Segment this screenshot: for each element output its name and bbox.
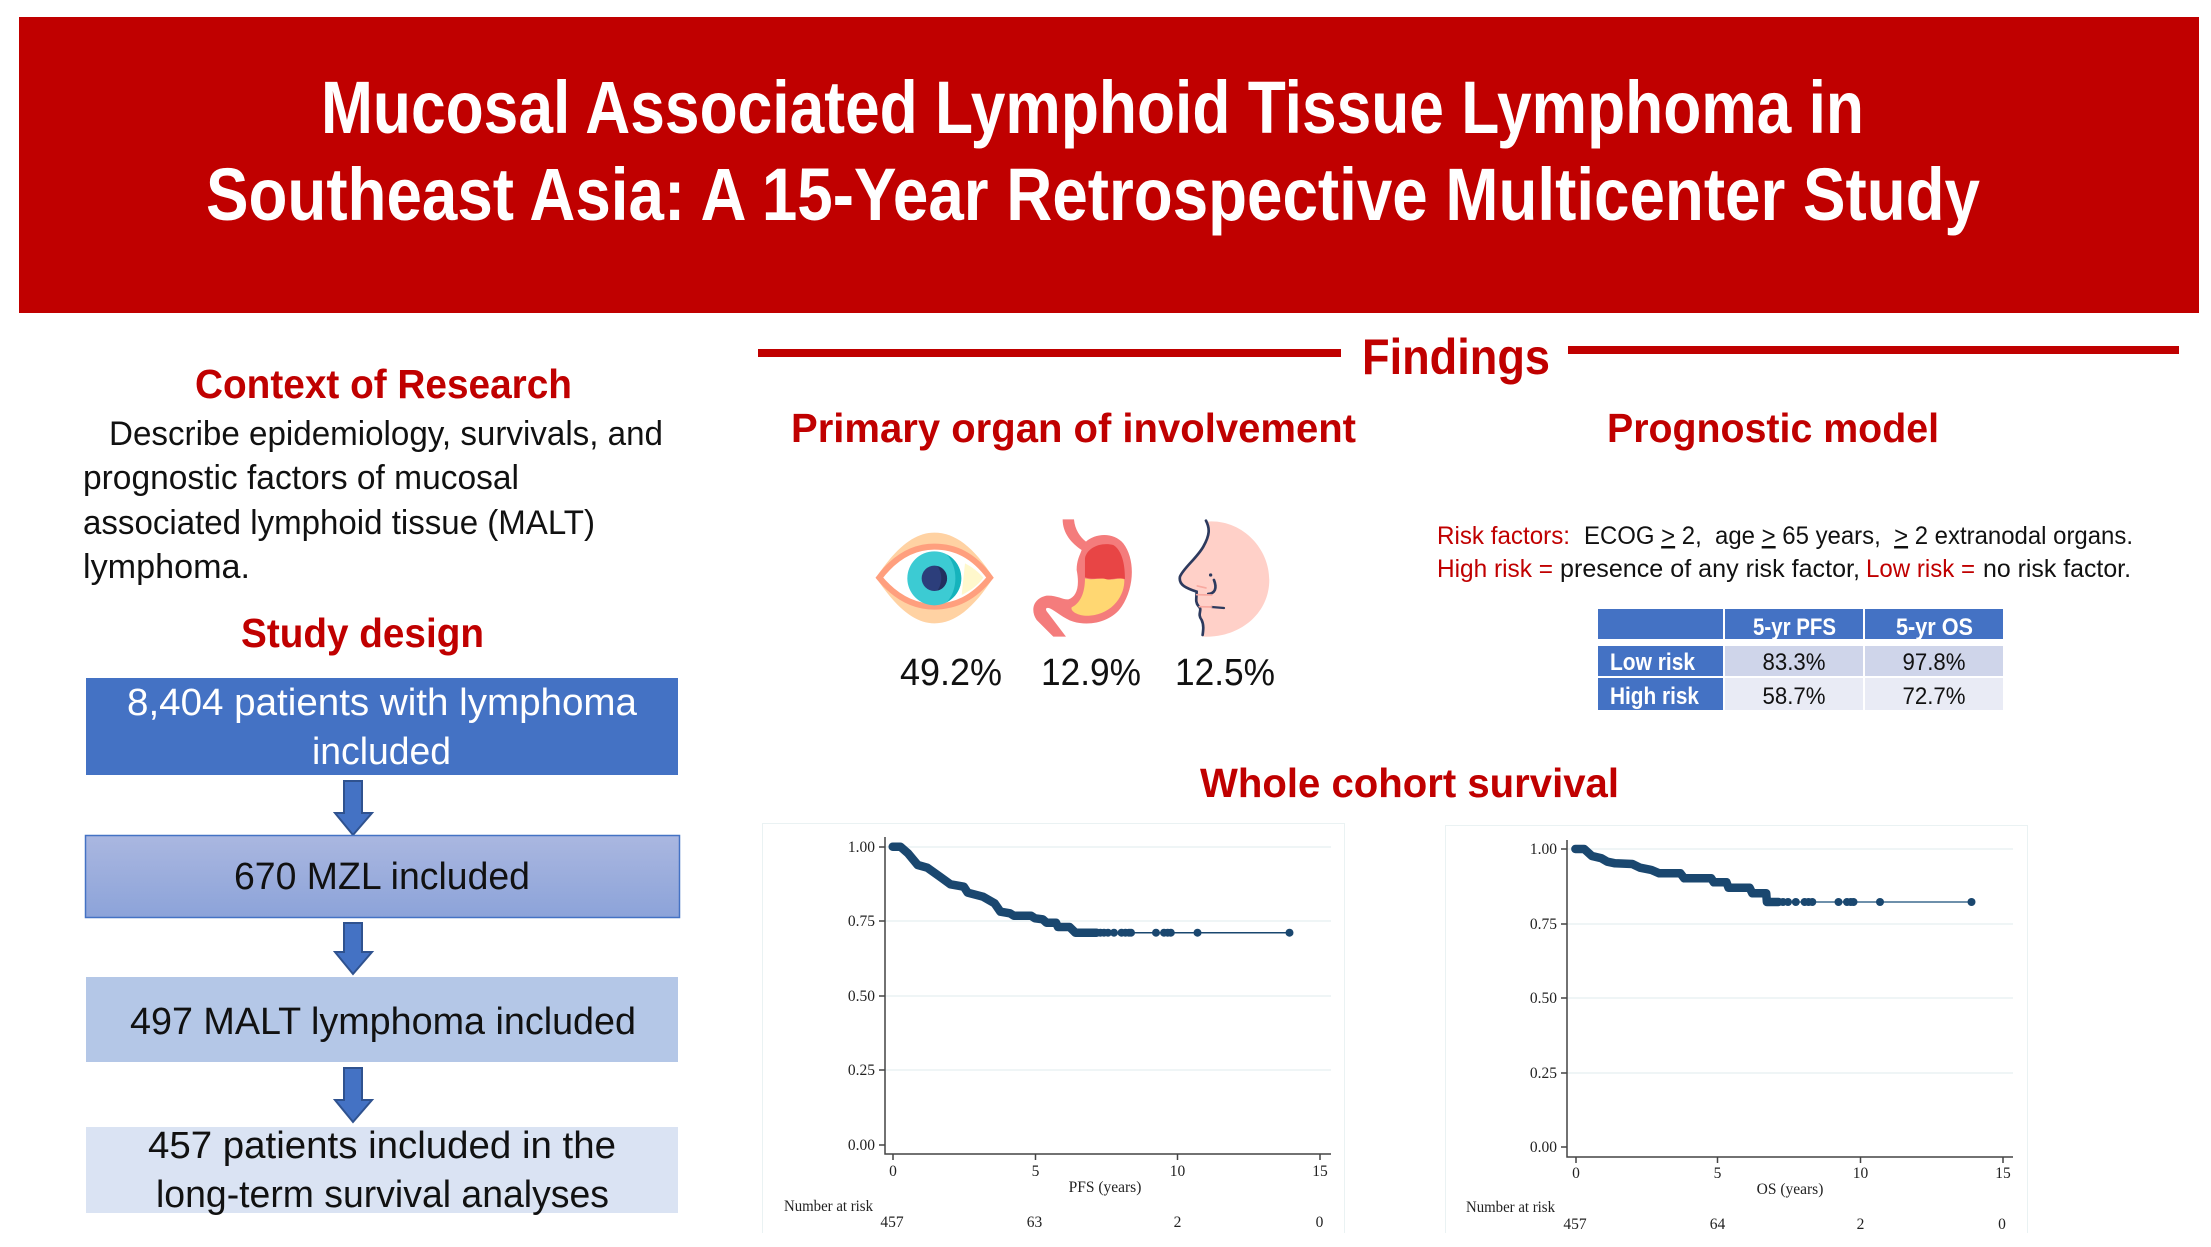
box: 497 MALT [86,977,678,1062]
chart: PFS Kaplan-Meier: 15 [1312,1163,1328,1180]
chart: OS Kaplan-Meier: 64 [1710,1216,1726,1233]
arrow 2 [335,923,372,974]
chart: PFS Kaplan-Meier [762,824,1344,1233]
panel: context of research [83,361,663,586]
risk factor definitions: presence of any risk factor, [1560,555,1860,583]
chart: PFS Kaplan-Meier: 63 [1027,1214,1042,1231]
risk factor definitions: Low risk = [1866,555,1975,583]
box: 8,404 patients [86,678,678,775]
box: 457 patients: 457 patients included in the [148,1125,616,1167]
risk table: High risk [1610,683,1700,710]
icon: stomach [1033,519,1132,637]
chart: OS Kaplan-Meier: 457 [1563,1216,1587,1233]
context text: prognostic factors of mucosal [83,459,519,497]
heading: prognostic model: Prognostic model [1607,405,1939,451]
icon: nose face [1180,521,1269,637]
chart: OS Kaplan-Meier: 5 [1714,1165,1722,1182]
risk factor definitions: no risk factor. [1983,555,2131,583]
percentages [900,652,1275,694]
context text: Describe epidemiology, survivals, and [109,415,663,453]
panel: primary organ of involvement [791,405,1356,694]
chart: OS Kaplan-Meier: 0.00 [1530,1139,1557,1156]
heading: whole cohort survival: Whole cohort survival [1200,760,1619,806]
chart: PFS Kaplan-Meier: 0.50 [848,988,875,1005]
box: 497 MALT: 497 MALT lymphoma included [130,1001,636,1043]
chart: OS Kaplan-Meier: Number at risk [1466,1199,1555,1216]
chart: OS Kaplan-Meier: 0.50 [1530,990,1557,1007]
chart: PFS Kaplan-Meier: 0.75 [848,913,875,930]
title: Mucosal Associated Lymphoid Tissue Lymphoma in [321,66,1864,149]
chart: OS Kaplan-Meier: 0 [1998,1216,2006,1233]
findings heading: Findings [1362,329,1550,385]
chart: PFS Kaplan-Meier: 1.00 [848,839,875,856]
title [206,66,1980,236]
box: 670 MZL: 670 MZL included [234,856,530,898]
chart: OS Kaplan-Meier: 2 [1857,1216,1864,1233]
chart: OS Kaplan-Meier: 15 [1995,1165,2011,1182]
heading: primary organ: Primary organ of involvement [791,405,1356,451]
box: 457 patients [86,1125,678,1216]
risk table: 97.8% [1902,649,1966,676]
chart: PFS Kaplan-Meier: 5 [1032,1163,1040,1180]
title banner [19,17,2199,313]
percentages: 49.2% [900,652,1002,694]
chart: PFS Kaplan-Meier: 10 [1170,1163,1186,1180]
chart: OS Kaplan-Meier [1446,826,2028,1233]
chart: PFS Kaplan-Meier: Number at risk [784,1198,873,1215]
risk table: 5-yr OS [1896,614,1973,641]
context text [83,415,663,586]
box: 670 MZL [86,836,680,918]
heading: context of research: Context of Research [195,361,572,407]
risk table: 72.7% [1902,683,1966,710]
risk factor definitions [1437,522,2133,583]
risk table: 58.7% [1762,683,1826,710]
box: 8,404 patients: 8,404 patients with lymphoma [127,682,638,724]
risk table: Low risk [1610,649,1696,676]
chart: OS Kaplan-Meier: 0.25 [1530,1065,1557,1082]
panel: study design flowchart [86,610,680,1216]
title: Southeast Asia: A 15-Year Retrospective Multicenter Study [206,153,1980,236]
arrow 1 [335,781,372,835]
box: 457 patients: long-term survival analyses [156,1174,609,1216]
risk table: 5-yr PFS [1753,614,1836,641]
context text: lymphoma. [83,548,250,586]
chart: PFS Kaplan-Meier: 0 [1316,1214,1324,1231]
box: 8,404 patients: included [312,731,451,773]
chart: OS Kaplan-Meier: OS (years) [1757,1181,1823,1198]
arrow 3 [335,1068,372,1122]
icon: eye [876,533,993,623]
chart: PFS Kaplan-Meier: 2 [1174,1214,1181,1231]
chart: PFS Kaplan-Meier: 0.00 [848,1137,875,1154]
chart: OS Kaplan-Meier: 1.00 [1530,841,1557,858]
chart: PFS Kaplan-Meier: PFS (years) [1069,1179,1141,1196]
risk factor definitions: ECOG > 2, age > 65 years, > 2 extranodal organs. [1584,522,2133,550]
chart: OS Kaplan-Meier: 0 [1572,1165,1580,1182]
findings heading [758,329,2179,385]
chart: PFS Kaplan-Meier: 457 [880,1214,904,1231]
chart: PFS Kaplan-Meier: 0 [889,1163,897,1180]
chart: PFS Kaplan-Meier: 0.25 [848,1062,875,1079]
risk table [1598,609,2003,710]
risk factor definitions: Risk factors: [1437,522,1570,550]
heading: study design: Study design [241,610,484,656]
chart: OS Kaplan-Meier: 10 [1853,1165,1868,1182]
risk factor definitions: High risk = [1437,555,1553,583]
percentages: 12.9% [1041,652,1141,694]
context text: associated lymphoid tissue (MALT) [83,504,595,542]
risk table: 83.3% [1762,649,1826,676]
chart: OS Kaplan-Meier: 0.75 [1530,916,1557,933]
panel: prognostic model [1437,405,2133,710]
percentages: 12.5% [1175,652,1275,694]
